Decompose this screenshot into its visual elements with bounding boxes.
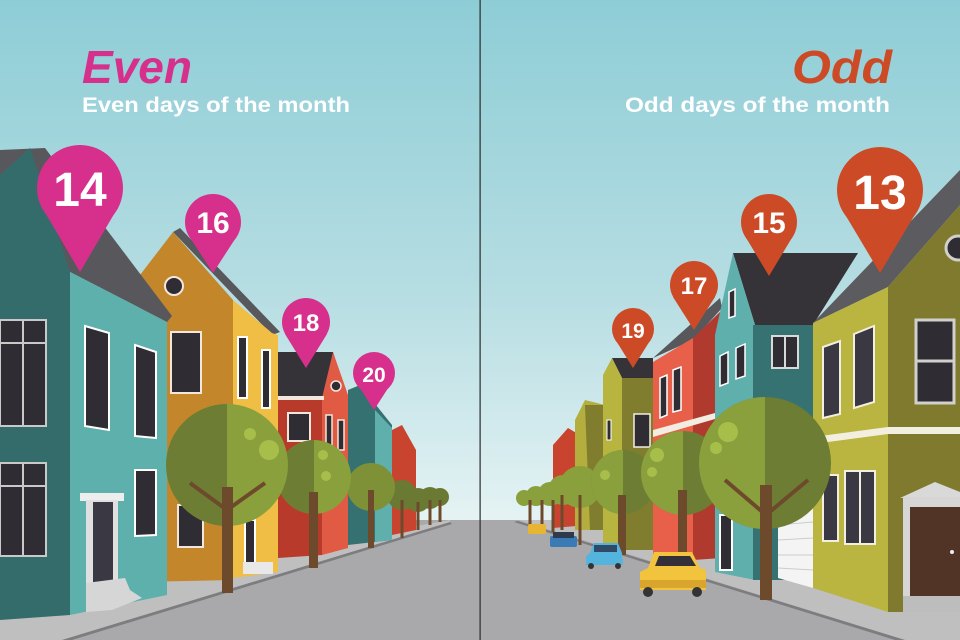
pin 19: 19 (621, 320, 645, 343)
pin 15 (741, 194, 797, 276)
road (0, 520, 960, 640)
pin 16 (185, 194, 241, 273)
far houses left (392, 425, 416, 535)
house 17 (653, 298, 722, 562)
title: Even (82, 41, 350, 117)
pin 17 (670, 261, 718, 330)
title: Even: Even (82, 41, 192, 93)
title: Odd (625, 41, 893, 117)
title: Odd: Odd days of the month (625, 94, 890, 117)
car: blue (586, 543, 623, 569)
sidewalk left (0, 520, 450, 640)
house 16 (140, 228, 280, 582)
pin 20: 20 (362, 364, 386, 387)
pin 20 (353, 352, 395, 410)
title: Even: Even days of the month (82, 94, 350, 117)
car: dark blue (550, 532, 577, 547)
cars (528, 524, 706, 597)
house 13 (778, 170, 960, 612)
pin 14: 14 (53, 164, 107, 217)
pin 17: 17 (681, 273, 707, 300)
title: Odd: Odd (792, 41, 893, 93)
car: yellow far (528, 524, 546, 534)
divider (480, 0, 481, 640)
far houses right (553, 428, 588, 528)
pin 18: 18 (293, 310, 319, 337)
car: yellow near (640, 552, 706, 597)
pin 15: 15 (752, 207, 786, 240)
house 18 (278, 352, 348, 558)
pin 13: 13 (853, 167, 907, 220)
panel: even side street (0, 148, 452, 640)
pin 19 (612, 308, 654, 368)
sidewalk right (518, 520, 960, 640)
pin 16: 16 (196, 207, 230, 240)
house 15 (715, 253, 858, 580)
pin 13 (837, 147, 923, 273)
house 14 (0, 148, 172, 620)
house 19 (603, 358, 653, 550)
pin 14 (37, 145, 123, 272)
trees left (166, 404, 449, 593)
garage (778, 503, 813, 588)
panel: odd side street (514, 170, 960, 640)
trees right (516, 397, 831, 600)
pin 18 (282, 298, 330, 368)
